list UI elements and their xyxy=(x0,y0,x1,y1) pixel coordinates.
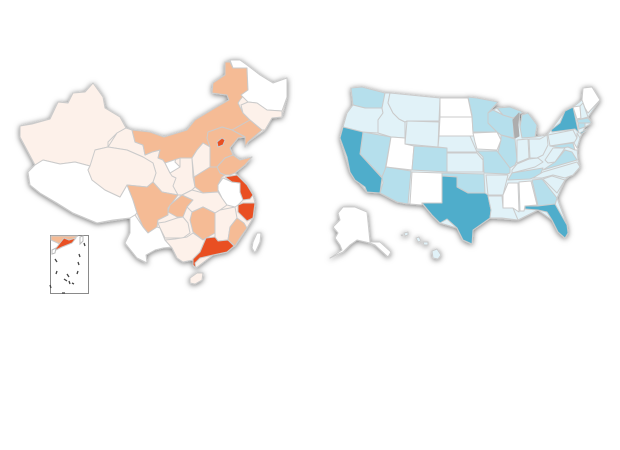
state: Idaho xyxy=(378,93,405,138)
region: Yunnan xyxy=(125,215,172,263)
region: Gansu xyxy=(108,128,180,195)
region: Jiangxi xyxy=(215,207,237,241)
region: Hebei xyxy=(207,127,245,167)
state: Massachusetts xyxy=(577,118,592,123)
state: South Carolina xyxy=(543,176,565,193)
state: Mississippi xyxy=(503,183,519,212)
region: Xinjiang xyxy=(20,83,126,166)
region: Fujian xyxy=(228,218,247,246)
state: Louisiana xyxy=(488,196,518,220)
region: Beijing xyxy=(217,138,225,147)
region: Heilongjiang xyxy=(230,60,287,111)
region: Anhui xyxy=(218,178,243,207)
silhouette: China base xyxy=(20,60,287,268)
state: Texas xyxy=(422,176,491,244)
inset: Guangdong xyxy=(54,238,76,251)
state: North Dakota xyxy=(440,98,472,117)
state: Nevada xyxy=(360,132,391,177)
state: Illinois xyxy=(498,135,517,168)
state: Wyoming xyxy=(405,121,439,147)
region: Hainan xyxy=(190,273,203,284)
state: Tennessee xyxy=(508,168,543,180)
region: Jilin xyxy=(241,102,282,130)
lake: Michigan xyxy=(513,113,519,138)
state: New Jersey xyxy=(574,133,580,148)
state: New York xyxy=(551,107,579,133)
region: Henan xyxy=(194,167,225,193)
silhouette: USA base xyxy=(340,87,600,244)
state: Arkansas xyxy=(486,175,508,195)
state: Vermont xyxy=(573,106,581,119)
map: China provinces xyxy=(20,60,287,284)
state: Utah xyxy=(386,137,414,170)
region: Taiwan xyxy=(252,233,261,253)
state: Kansas xyxy=(447,153,483,172)
inset: South China Sea xyxy=(50,236,88,294)
state: Michigan lower xyxy=(520,113,537,138)
state: South Dakota xyxy=(439,117,475,136)
state: New Mexico xyxy=(410,172,442,205)
region: Tibet xyxy=(28,160,137,223)
region: Liaoning xyxy=(232,120,262,147)
state: Virginia xyxy=(543,150,577,170)
state: Oregon xyxy=(343,105,383,133)
state: Kentucky xyxy=(512,158,543,173)
state: Michigan upper xyxy=(497,107,523,118)
state: Oklahoma xyxy=(442,173,485,193)
region: Inner Mongolia xyxy=(132,62,250,163)
region: Shaanxi xyxy=(170,158,195,195)
state: California xyxy=(340,127,382,193)
state: Montana xyxy=(388,93,440,122)
state: Colorado xyxy=(412,146,447,172)
state: Nebraska xyxy=(438,136,477,152)
state: Minnesota xyxy=(468,97,498,132)
inset: mainland coast xyxy=(51,236,78,245)
state: Georgia xyxy=(532,179,557,206)
state: Indiana xyxy=(517,139,529,163)
inset: Hainan and Taiwan xyxy=(52,236,83,254)
region: Jiangsu xyxy=(225,175,253,200)
state: Pennsylvania xyxy=(548,130,577,146)
state: Long Island xyxy=(580,129,587,134)
state: Ohio xyxy=(529,135,548,158)
state: Wisconsin xyxy=(488,110,514,138)
state: Missouri xyxy=(477,151,510,174)
region: Hunan xyxy=(190,207,215,240)
region: Ningxia xyxy=(165,152,180,173)
state: Arizona xyxy=(380,167,411,204)
state: Maine xyxy=(582,87,600,113)
state: Washington xyxy=(351,87,385,108)
state: Maryland xyxy=(550,143,575,150)
state: Alaska xyxy=(330,207,391,258)
state: Hawaii xyxy=(401,232,441,259)
region: Guangdong xyxy=(193,237,234,268)
state: West Virginia xyxy=(545,148,565,163)
region: Zhejiang xyxy=(238,203,255,221)
region: Shandong xyxy=(217,155,252,175)
state: Florida xyxy=(525,204,568,238)
region: Sichuan xyxy=(127,182,178,233)
state: Delaware xyxy=(573,142,578,150)
state: Connecticut xyxy=(578,123,585,129)
map: USA states xyxy=(330,87,600,259)
region: Guangxi xyxy=(165,233,206,262)
state: Iowa xyxy=(473,132,501,150)
inset: islands xyxy=(50,243,85,293)
state: Alabama xyxy=(519,181,537,211)
region: Chongqing xyxy=(168,195,193,217)
region: Hubei xyxy=(182,190,227,213)
region: Qinghai xyxy=(88,147,156,197)
state: North Carolina xyxy=(533,162,580,178)
region: Shanxi xyxy=(192,143,210,177)
region: Guizhou xyxy=(158,217,190,238)
state: New Hampshire xyxy=(580,103,588,119)
